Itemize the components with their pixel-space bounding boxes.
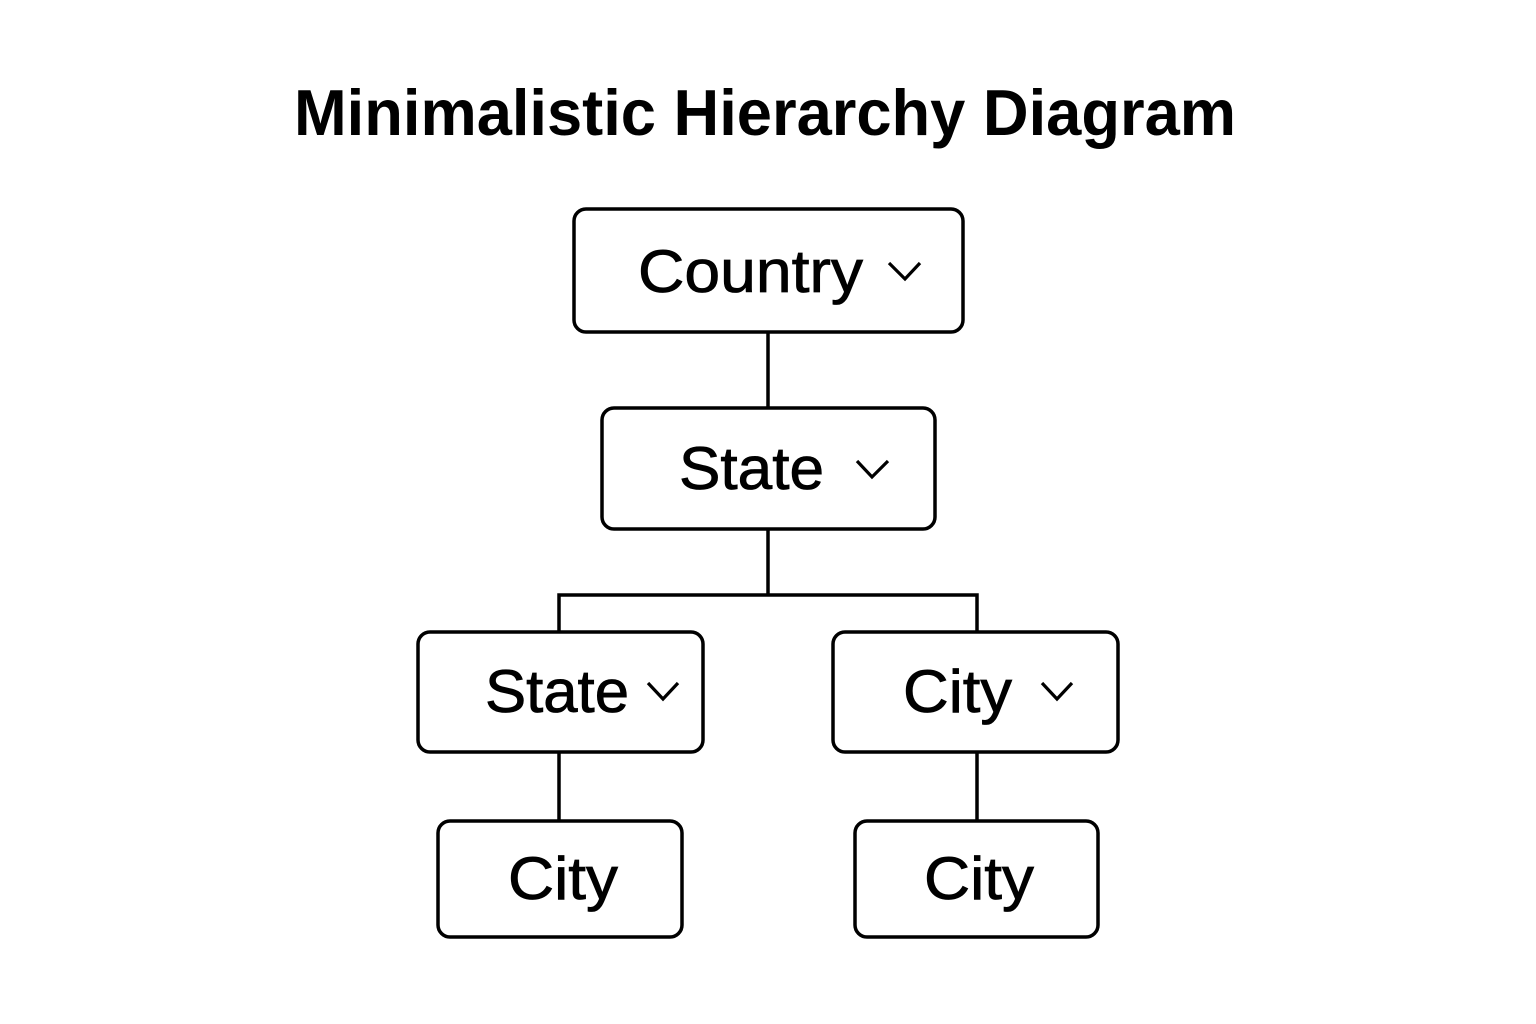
connector: state to children — [559, 529, 977, 632]
node: left state — [418, 632, 703, 752]
node: state — [602, 408, 935, 529]
node: right city: City — [903, 658, 1012, 725]
node: bottom left city: City — [508, 845, 618, 912]
node: country: Country — [638, 238, 863, 305]
icon: chevron — [648, 683, 678, 699]
node: right city — [833, 632, 1118, 752]
node: bottom left city — [438, 821, 682, 937]
icon: chevron — [889, 263, 920, 279]
node: bottom right city — [855, 821, 1098, 937]
node: bottom right city: City — [924, 845, 1034, 912]
node: state: State — [679, 435, 824, 502]
connector: right city to city — [975, 752, 979, 821]
node: country — [574, 209, 963, 332]
node: left state: State — [485, 658, 629, 725]
connector: left state to city — [557, 752, 561, 821]
title: Minimalistic Hierarchy Diagram — [294, 76, 1236, 149]
icon: chevron — [857, 461, 888, 477]
icon: chevron — [1042, 683, 1072, 699]
connector: country to state — [766, 332, 770, 408]
